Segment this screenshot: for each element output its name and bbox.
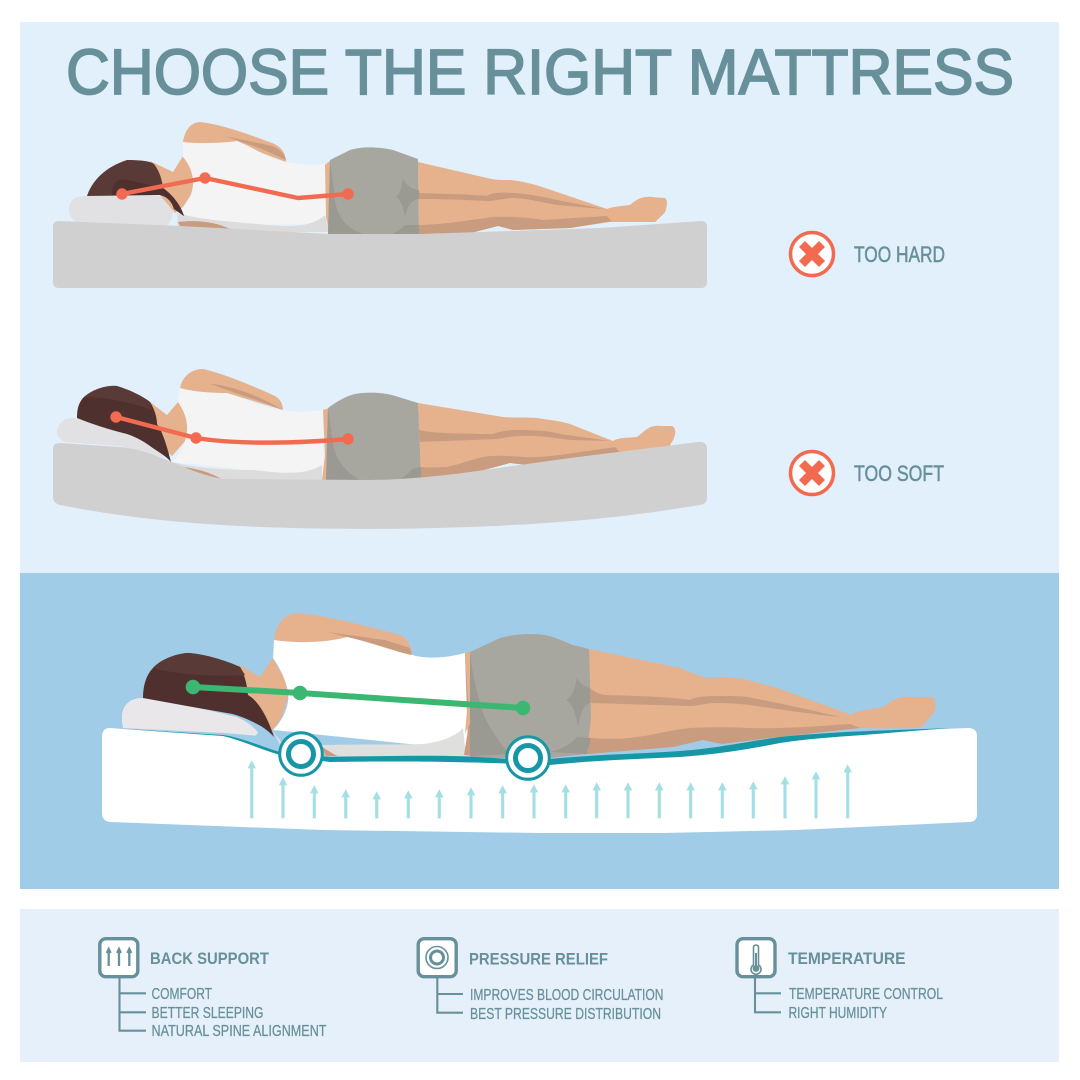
- spine line: [116, 172, 354, 200]
- foot: [607, 197, 667, 222]
- list: [788, 986, 943, 1022]
- icon: concentric rings: [418, 939, 456, 977]
- leg shadows: [419, 193, 612, 234]
- list: [152, 986, 327, 1040]
- under arm: [178, 221, 232, 230]
- icon: pressure point left: [280, 733, 322, 775]
- neck and shoulder: [238, 658, 288, 730]
- benefit: temperature: [737, 939, 943, 1022]
- list: IMPROVES BLOOD CIRCULATION: [470, 987, 664, 1004]
- label: too hard: TOO HARD: [854, 242, 945, 267]
- mattress: [102, 728, 977, 833]
- benefit: pressure relief: [418, 939, 664, 1023]
- list: BEST PRESSURE DISTRIBUTION: [470, 1006, 661, 1023]
- under arm: [182, 467, 223, 480]
- heading: TEMPERATURE: [788, 949, 906, 968]
- title: CHOOSE THE RIGHT MATTRESS: [66, 36, 1014, 108]
- hair: [87, 160, 184, 216]
- shirt shadow: [273, 728, 466, 756]
- panel: benefits background: [20, 909, 1059, 1062]
- pillow: [69, 196, 173, 228]
- icon: thermometer: [737, 939, 775, 977]
- shirt shadow: [172, 462, 322, 480]
- benefit: back support: [100, 939, 327, 1040]
- shirt shadow: [177, 213, 329, 232]
- mattress surface line: [110, 728, 950, 765]
- panel: correct mattress background: [20, 573, 1059, 889]
- shorts: [470, 634, 591, 758]
- shirt: [273, 637, 468, 750]
- icon: too hard cross: [790, 232, 834, 276]
- legs: [418, 162, 667, 234]
- illustration: too soft mattress: [53, 369, 707, 529]
- illustration: correct mattress: [102, 613, 977, 833]
- neck and shoulder: [150, 156, 196, 213]
- illustration: too hard mattress: [53, 122, 707, 288]
- list: TEMPERATURE CONTROL: [789, 986, 943, 1003]
- waist skin: [322, 408, 329, 480]
- shorts: [326, 393, 421, 481]
- panel: incorrect mattresses background: [20, 22, 1059, 573]
- pillow: [57, 418, 165, 458]
- connector lines: [755, 978, 781, 1012]
- waist skin: [464, 651, 473, 755]
- arm: [183, 122, 286, 162]
- icon: pressure point right: [507, 737, 549, 779]
- spine line: [186, 680, 530, 715]
- list: COMFORT: [152, 986, 212, 1003]
- hair: [143, 653, 274, 737]
- leg shadows: [587, 688, 860, 754]
- pillow: [122, 698, 260, 736]
- leg shadows: [419, 430, 623, 478]
- hair: [77, 386, 171, 462]
- list: NATURAL SPINE ALIGNMENT: [152, 1023, 327, 1040]
- spine line: [110, 411, 354, 445]
- shirt: [172, 388, 324, 478]
- connector lines: [437, 978, 463, 1013]
- shorts shadow: [326, 408, 421, 481]
- connector lines: [120, 978, 146, 1031]
- under arm: [322, 747, 337, 756]
- mattress: [53, 442, 707, 529]
- heading: BACK SUPPORT: [150, 949, 270, 968]
- list: [470, 987, 664, 1023]
- legs: [418, 403, 675, 478]
- arm: [274, 613, 412, 656]
- list: RIGHT HUMIDITY: [788, 1005, 887, 1022]
- label: too soft: TOO SOFT: [854, 461, 944, 486]
- legs: [587, 649, 935, 754]
- shorts shadows: [470, 652, 591, 756]
- shorts: [328, 147, 419, 234]
- list: BETTER SLEEPING: [152, 1005, 264, 1022]
- foot: [613, 426, 675, 452]
- support arrows: [248, 761, 851, 818]
- icon: too soft cross: [790, 452, 834, 494]
- foot: [852, 697, 935, 728]
- heading: PRESSURE RELIEF: [469, 950, 608, 968]
- icon: back support arrows: [100, 939, 138, 977]
- shorts shadows: [328, 160, 419, 234]
- neck and shoulder: [150, 402, 190, 456]
- gap under neck: [250, 728, 280, 752]
- shirt: [177, 141, 329, 226]
- mattress: [53, 221, 707, 288]
- arm: [180, 369, 283, 410]
- waist skin: [325, 160, 332, 233]
